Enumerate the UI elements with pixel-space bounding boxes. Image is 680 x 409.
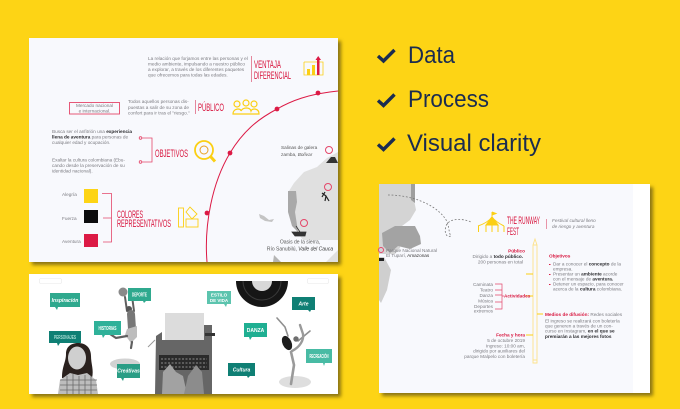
tag: top left xyxy=(40,278,62,284)
panel: ventaja slide xyxy=(29,38,338,262)
heading: ventaja diferencial: VENTAJA xyxy=(254,59,281,71)
text: ventaja description: medio ambiente, impulsando a nuestro público xyxy=(148,62,245,66)
icon: circus tent xyxy=(478,212,504,232)
text: actividades list: Música xyxy=(478,298,493,304)
callout: mercado xyxy=(70,102,120,114)
text: objetivos: Presentar un ambiente acorde xyxy=(553,272,617,276)
label: parque nacional xyxy=(378,248,437,261)
heading: the runway fest: FEST xyxy=(507,226,519,238)
route curve xyxy=(205,91,338,262)
callout: mercado: e internacional. xyxy=(79,108,110,114)
item: process xyxy=(378,86,489,113)
label: salinas: zamba, Bolívar xyxy=(281,152,312,157)
text: objetivo 1: para personas de xyxy=(90,134,128,140)
text: fecha y hora: Fecha y hora xyxy=(496,332,525,338)
image: typewriter xyxy=(148,313,215,394)
text: objetivos: Detener un espacio, para conocer xyxy=(553,282,624,286)
text: público: 200 personas en total xyxy=(478,260,523,264)
text: objetivos: Dar a conocer el concepto de la xyxy=(553,262,621,266)
text: medios de difusión: que generen a través de un con- xyxy=(545,324,613,328)
text: actividades label: Actividades xyxy=(504,294,531,298)
speech bubble: creativas xyxy=(117,364,140,381)
text: público description: Todos aquellos personas dis- xyxy=(128,99,189,104)
heading: público: PÚBLICO xyxy=(198,101,224,114)
icon: palette xyxy=(178,207,198,227)
speech bubble: personajes: PERSONAJES xyxy=(54,335,76,341)
heading: colores representativos xyxy=(117,209,171,230)
map: coastline xyxy=(379,184,421,303)
text: objetivo 1: experiencia xyxy=(106,129,132,134)
text: fecha y hora: dirigido por auxiliares del xyxy=(473,348,525,354)
label: parque nacional: El Tuparí, Amazonas xyxy=(386,253,429,258)
text: objetivos: con el mensaje de aventura. xyxy=(553,276,613,282)
text: objetivo 1: llena de aventura xyxy=(52,134,91,140)
text: objetivo 2: cando desde la preservación de su xyxy=(52,163,125,168)
speech bubble: cultura xyxy=(228,363,255,378)
text: actividades list: Teatro xyxy=(480,288,493,292)
text: fecha y hora: Ingreso: 10:00 am, xyxy=(486,344,525,348)
text: público: Público xyxy=(508,248,525,254)
speech bubble: arte xyxy=(292,297,315,312)
text: festival description: de riesgo y aventura xyxy=(552,224,595,229)
image: basketball player xyxy=(110,288,137,348)
text: ventaja description: a explorar, a través de los diferentes paquetes xyxy=(148,67,245,72)
label: salinas: Salinas de galera xyxy=(281,145,318,150)
speech bubble: cultura: Cultura xyxy=(233,368,250,374)
text: medios de difusión: Medios de difusión: Redes sociales xyxy=(545,312,623,317)
speech bubble: danza: DANZA xyxy=(247,328,265,334)
panel: collage slide xyxy=(29,255,338,394)
heading: colores representativos: COLORES xyxy=(117,209,143,221)
divider xyxy=(545,219,548,229)
text: festival description: Festival cultural lleno xyxy=(552,218,596,223)
text: objetivo 2: identidad nacional). xyxy=(52,168,93,174)
label: parque nacional: Parque Nacional Natural xyxy=(386,248,437,253)
speech bubble: estilo de vida: ESTILO xyxy=(211,292,228,298)
text: público xyxy=(472,248,525,264)
speech bubble: recreación xyxy=(306,349,332,366)
speech bubble: inspiración: Inspiración xyxy=(52,298,78,304)
speech bubble: danza xyxy=(244,323,267,340)
image: oval shadow xyxy=(110,358,140,370)
text: objetivos xyxy=(549,254,624,292)
text: objetivos: acerca de la cultura colombiana. xyxy=(553,286,622,292)
text: fecha y hora: 5 de octubre 2019 xyxy=(487,338,525,343)
speech bubble: deporte xyxy=(128,288,151,303)
speech bubble: personajes xyxy=(49,331,81,346)
text: público: Dirigido a todo público. xyxy=(472,254,523,259)
icon: magnifier xyxy=(195,141,215,162)
speech bubble: inspiración xyxy=(50,293,80,310)
callout: mercado: Mercado nacional xyxy=(76,103,113,108)
speech bubble: arte: Arte xyxy=(297,302,309,308)
text: objetivo 2: Exaltar la cultura colombiana (Ebu- xyxy=(52,158,125,162)
text: medios de difusión xyxy=(545,312,623,339)
text: actividades list: Deportes xyxy=(474,304,494,309)
heading: público xyxy=(195,100,224,114)
item: process: Process xyxy=(408,86,489,113)
icon: hiker pin xyxy=(322,184,332,201)
image: woman portrait xyxy=(58,343,98,394)
text: medios de difusión: curso en Instagram, en el que se xyxy=(545,328,615,334)
map: coastline xyxy=(259,152,338,262)
text: objetivo 1: cualquier edad y ocupación. xyxy=(52,140,110,145)
connector: objetivos bracket xyxy=(139,137,152,163)
item: data: Data xyxy=(408,42,456,69)
text: público description: puestas a salir de su zona de xyxy=(128,105,189,110)
text: actividades list: Caminata xyxy=(473,282,493,287)
legend: brand colours xyxy=(62,189,112,247)
text: medios de difusión: El ingreso se realizará con boletería xyxy=(545,318,620,324)
speech bubble: recreación: RECREACIÓN xyxy=(310,352,329,360)
legend: brand colours: Aventura xyxy=(62,239,81,244)
text: fecha y hora: parque Malpelo con boletería xyxy=(464,354,525,359)
text: ventaja description: que ofrecemos para todas las edades. xyxy=(148,72,228,78)
panel: runway fest slide: THE RUNWAY xyxy=(507,215,540,227)
image: vinyl record xyxy=(236,281,288,307)
icon: boat pin xyxy=(292,220,308,236)
label: oasis: Río Sanubilú, Valle del Cauca xyxy=(267,246,333,252)
text: actividades list: Danza xyxy=(479,293,493,298)
item: visual clarity: Visual clarity xyxy=(407,130,541,157)
speech bubble: deporte: DEPORTE xyxy=(132,292,147,298)
speech bubble: historias xyxy=(94,321,121,338)
legend: brand colours: Fuerza xyxy=(62,216,77,221)
icon: bar chart xyxy=(304,56,323,75)
timeline: pencil xyxy=(526,239,543,363)
text: ventaja description: La relación que forjamos entre las personas y el xyxy=(148,56,248,61)
speech bubble: estilo de vida: DE VIDA xyxy=(210,298,229,303)
label: oasis: Oasis de la sierra, xyxy=(280,240,320,246)
heading: objetivos: OBJETIVOS xyxy=(155,148,188,160)
heading: the runway fest xyxy=(507,215,540,238)
checklist xyxy=(378,42,541,157)
panel: runway fest slide xyxy=(378,184,650,393)
text: objetivos: empresa. xyxy=(553,266,573,272)
speech bubble: estilo de vida xyxy=(207,291,231,307)
legend: brand colours: Alegría xyxy=(62,192,77,197)
speech bubble: historias: HISTORIAS xyxy=(98,326,117,332)
text: fecha y hora xyxy=(464,332,525,359)
heading: colores representativos: REPRESENTATIVOS xyxy=(117,218,171,230)
text: público description: confort para ir tras el "riesgo." xyxy=(128,110,190,116)
dotted route xyxy=(388,195,471,236)
item: data xyxy=(378,42,456,69)
bracket: actividades xyxy=(495,284,504,309)
heading: ventaja diferencial: DIFERENCIAL xyxy=(254,70,291,82)
icon: people xyxy=(233,100,259,114)
text: medios de difusión: premiarán a las mejores fotos xyxy=(545,334,612,339)
text: actividades list: extremos xyxy=(474,308,494,314)
speech bubble: creativas: Creátivas xyxy=(117,368,140,374)
text: objetivo 1: Busca ser el anfitrión una xyxy=(52,129,106,134)
tag: top right xyxy=(308,278,328,284)
text: objetivos: Objetivos xyxy=(549,254,571,258)
image: gymnast xyxy=(277,318,311,388)
label: salinas xyxy=(281,145,338,163)
heading: ventaja diferencial xyxy=(251,56,291,82)
